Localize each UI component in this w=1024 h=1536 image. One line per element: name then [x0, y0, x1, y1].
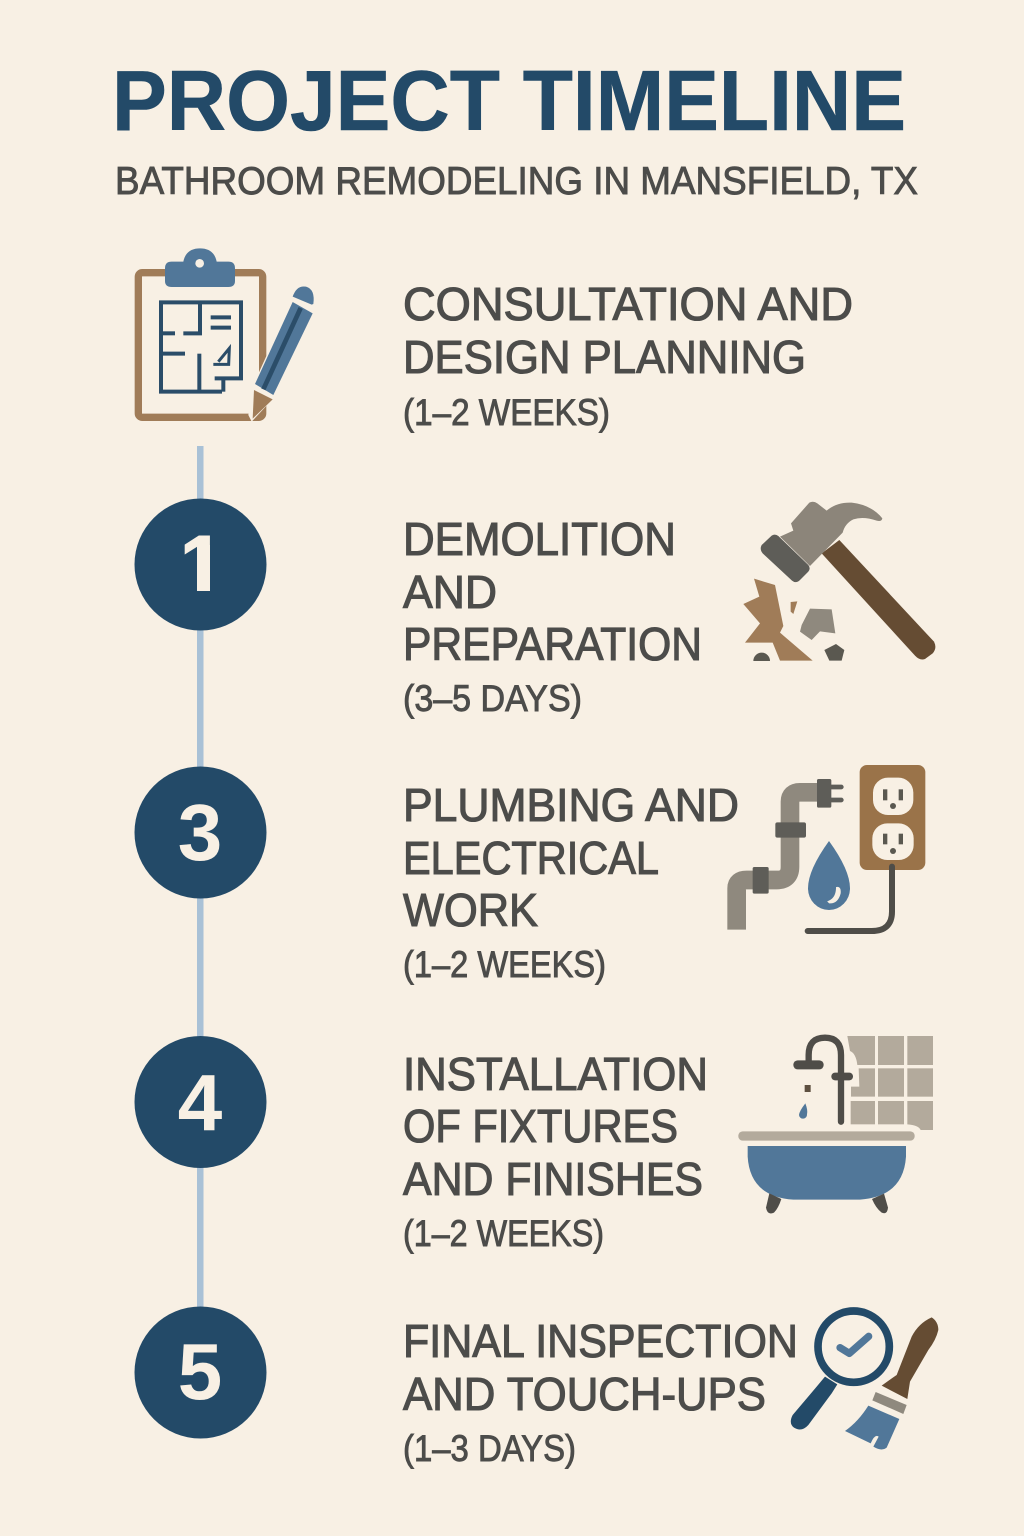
- text: installation of fixtures and finishes: AND FINISHES: [403, 1153, 703, 1205]
- text: final inspection and touch-ups: FINAL INSPECTION: [403, 1315, 798, 1367]
- title: PROJECT TIMELINE: [112, 54, 906, 149]
- text: final inspection and touch-ups: AND TOUCH-UPS: [403, 1368, 766, 1420]
- text: consultation and design planning: [403, 278, 853, 433]
- step 4 circle: 4: [178, 1058, 223, 1147]
- step 5 circle: [134, 1306, 266, 1438]
- text: demolition and preparation: (3–5 DAYS): [403, 677, 582, 719]
- text: plumbing and electrical work: [403, 779, 739, 985]
- icon: hammer and rubble: [743, 502, 935, 661]
- text: demolition and preparation: [403, 513, 702, 719]
- step 3 circle: 3: [178, 788, 222, 877]
- text: final inspection and touch-ups: (1–3 DAYS): [403, 1427, 576, 1469]
- text: plumbing and electrical work: PLUMBING AND: [403, 779, 739, 831]
- icon: pipe, plug, water drop and outlet: [737, 765, 925, 931]
- text: demolition and preparation: AND: [403, 566, 497, 618]
- text: consultation and design planning: CONSULTATION AND: [403, 278, 853, 330]
- text: final inspection and touch-ups: [403, 1315, 798, 1469]
- step 1 circle: [134, 498, 266, 630]
- text: plumbing and electrical work: WORK: [403, 884, 538, 936]
- icon: bathtub, shower and tiles: [738, 1036, 933, 1213]
- text: installation of fixtures and finishes: OF FIXTURES: [403, 1100, 678, 1152]
- text: consultation and design planning: (1–2 WEEKS): [403, 391, 610, 433]
- step 4 circle: [134, 1036, 266, 1168]
- text: installation of fixtures and finishes: [403, 1048, 708, 1254]
- text: consultation and design planning: DESIGN PLANNING: [403, 331, 806, 383]
- icon: magnifier with check and paint brush: [791, 1311, 938, 1449]
- text: plumbing and electrical work: ELECTRICAL: [403, 832, 659, 884]
- step 5 circle: 5: [178, 1327, 222, 1416]
- icon: clipboard with floor plan and pencil: [138, 248, 315, 422]
- step 3 circle: [134, 766, 266, 898]
- text: installation of fixtures and finishes: (1–2 WEEKS): [403, 1212, 604, 1254]
- text: demolition and preparation: PREPARATION: [403, 618, 702, 670]
- timeline line: [197, 446, 204, 1316]
- step 1 circle: 1: [180, 519, 224, 608]
- text: installation of fixtures and finishes: INSTALLATION: [403, 1048, 708, 1100]
- subtitle: BATHROOM REMODELING IN MANSFIELD, TX: [115, 160, 918, 203]
- text: demolition and preparation: DEMOLITION: [403, 513, 676, 565]
- text: plumbing and electrical work: (1–2 WEEKS): [403, 943, 606, 985]
